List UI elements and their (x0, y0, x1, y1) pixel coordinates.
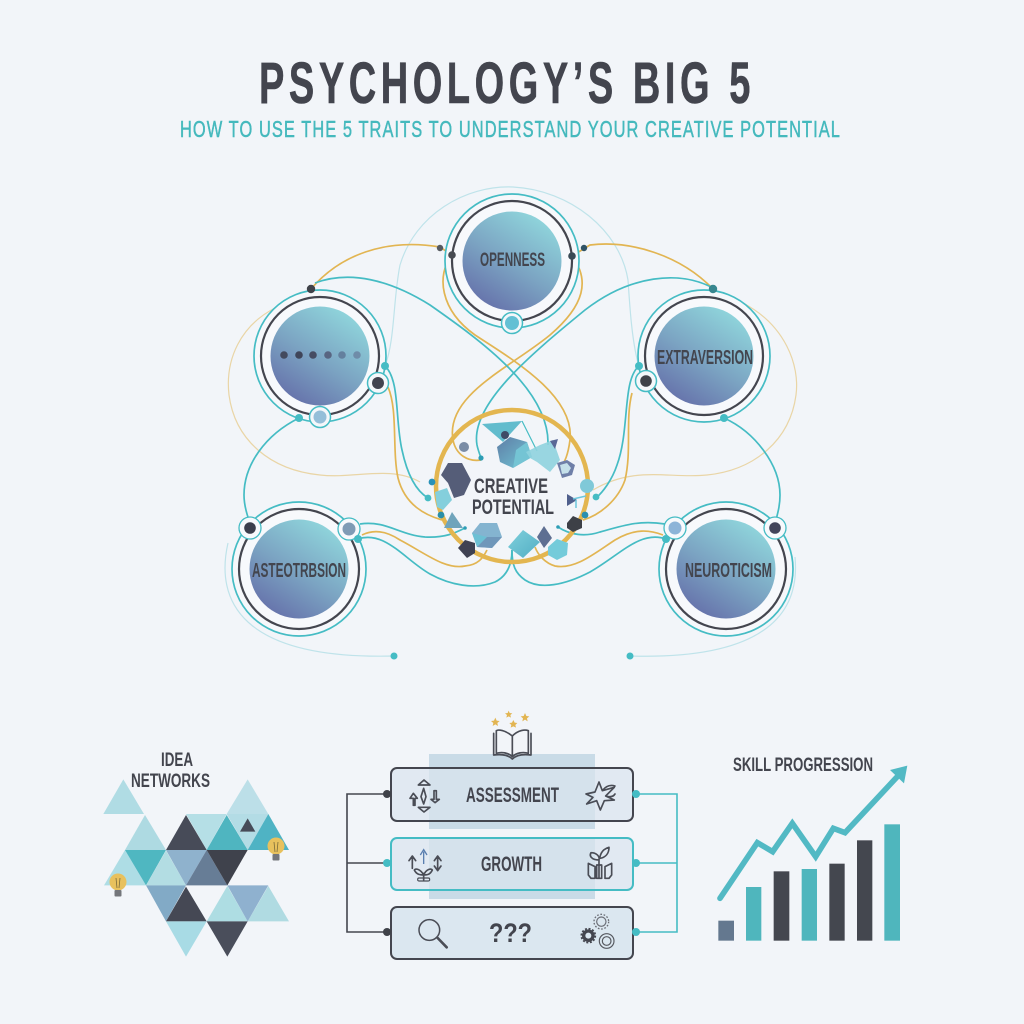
connector dots (383, 790, 640, 936)
hub label (472, 475, 554, 519)
connector network between traits and creative potential (225, 187, 797, 660)
icon: growth plant (588, 847, 612, 878)
crystal cluster (425, 421, 599, 560)
label: neuroticism: NEUROTICISM (685, 560, 772, 582)
text: growth: GROWTH (481, 853, 542, 876)
idea networks heading (131, 750, 210, 792)
text: assessment: ASSESSMENT (466, 784, 559, 807)
text: question marks: ??? (489, 918, 532, 948)
row: unknown (391, 907, 633, 959)
triangle mosaic (103, 779, 289, 957)
hub label: CREATIVE (474, 475, 548, 498)
trait node: neuroticism (659, 502, 793, 636)
icon: assessment star and leaf (586, 782, 615, 810)
label: garbled trait: ASTEOTRBSION (252, 560, 346, 582)
masked label dots (280, 351, 361, 359)
idea networks heading: NETWORKS (131, 771, 210, 792)
left connector bracket (347, 794, 391, 932)
trait node: unnamed dots (254, 285, 389, 428)
trait node: extraversion (635, 285, 770, 422)
trait node: garbled lower left (232, 502, 366, 636)
title: PSYCHOLOGY’S BIG 5 (259, 51, 755, 116)
icon: growth arrows and sprout (409, 850, 441, 881)
icon: gears (581, 914, 614, 948)
idea networks heading: IDEA (161, 750, 193, 771)
label: openness: OPENNESS (480, 250, 545, 271)
icon: lightbulb right (268, 838, 284, 860)
hub label: POTENTIAL (472, 496, 554, 519)
right connector bracket (633, 794, 677, 932)
panel: idea networks (103, 750, 289, 957)
label: extraversion: EXTRAVERSION (657, 347, 753, 369)
icon: assessment arrows (410, 780, 439, 812)
icon: magnifier (419, 920, 447, 947)
central creative potential hub (425, 410, 599, 562)
row: assessment (391, 768, 633, 821)
panel: skill progression (718, 754, 907, 941)
icon: lightbulb left (110, 874, 126, 896)
panel: development steps (347, 711, 677, 959)
icon: book with stars (491, 711, 531, 759)
trend arrow (720, 766, 907, 898)
bar chart (718, 824, 900, 941)
skill progression heading: SKILL PROGRESSION (733, 754, 873, 776)
trait node: openness (445, 194, 579, 334)
row: growth (391, 838, 633, 890)
translucent backing blocks (429, 754, 595, 899)
